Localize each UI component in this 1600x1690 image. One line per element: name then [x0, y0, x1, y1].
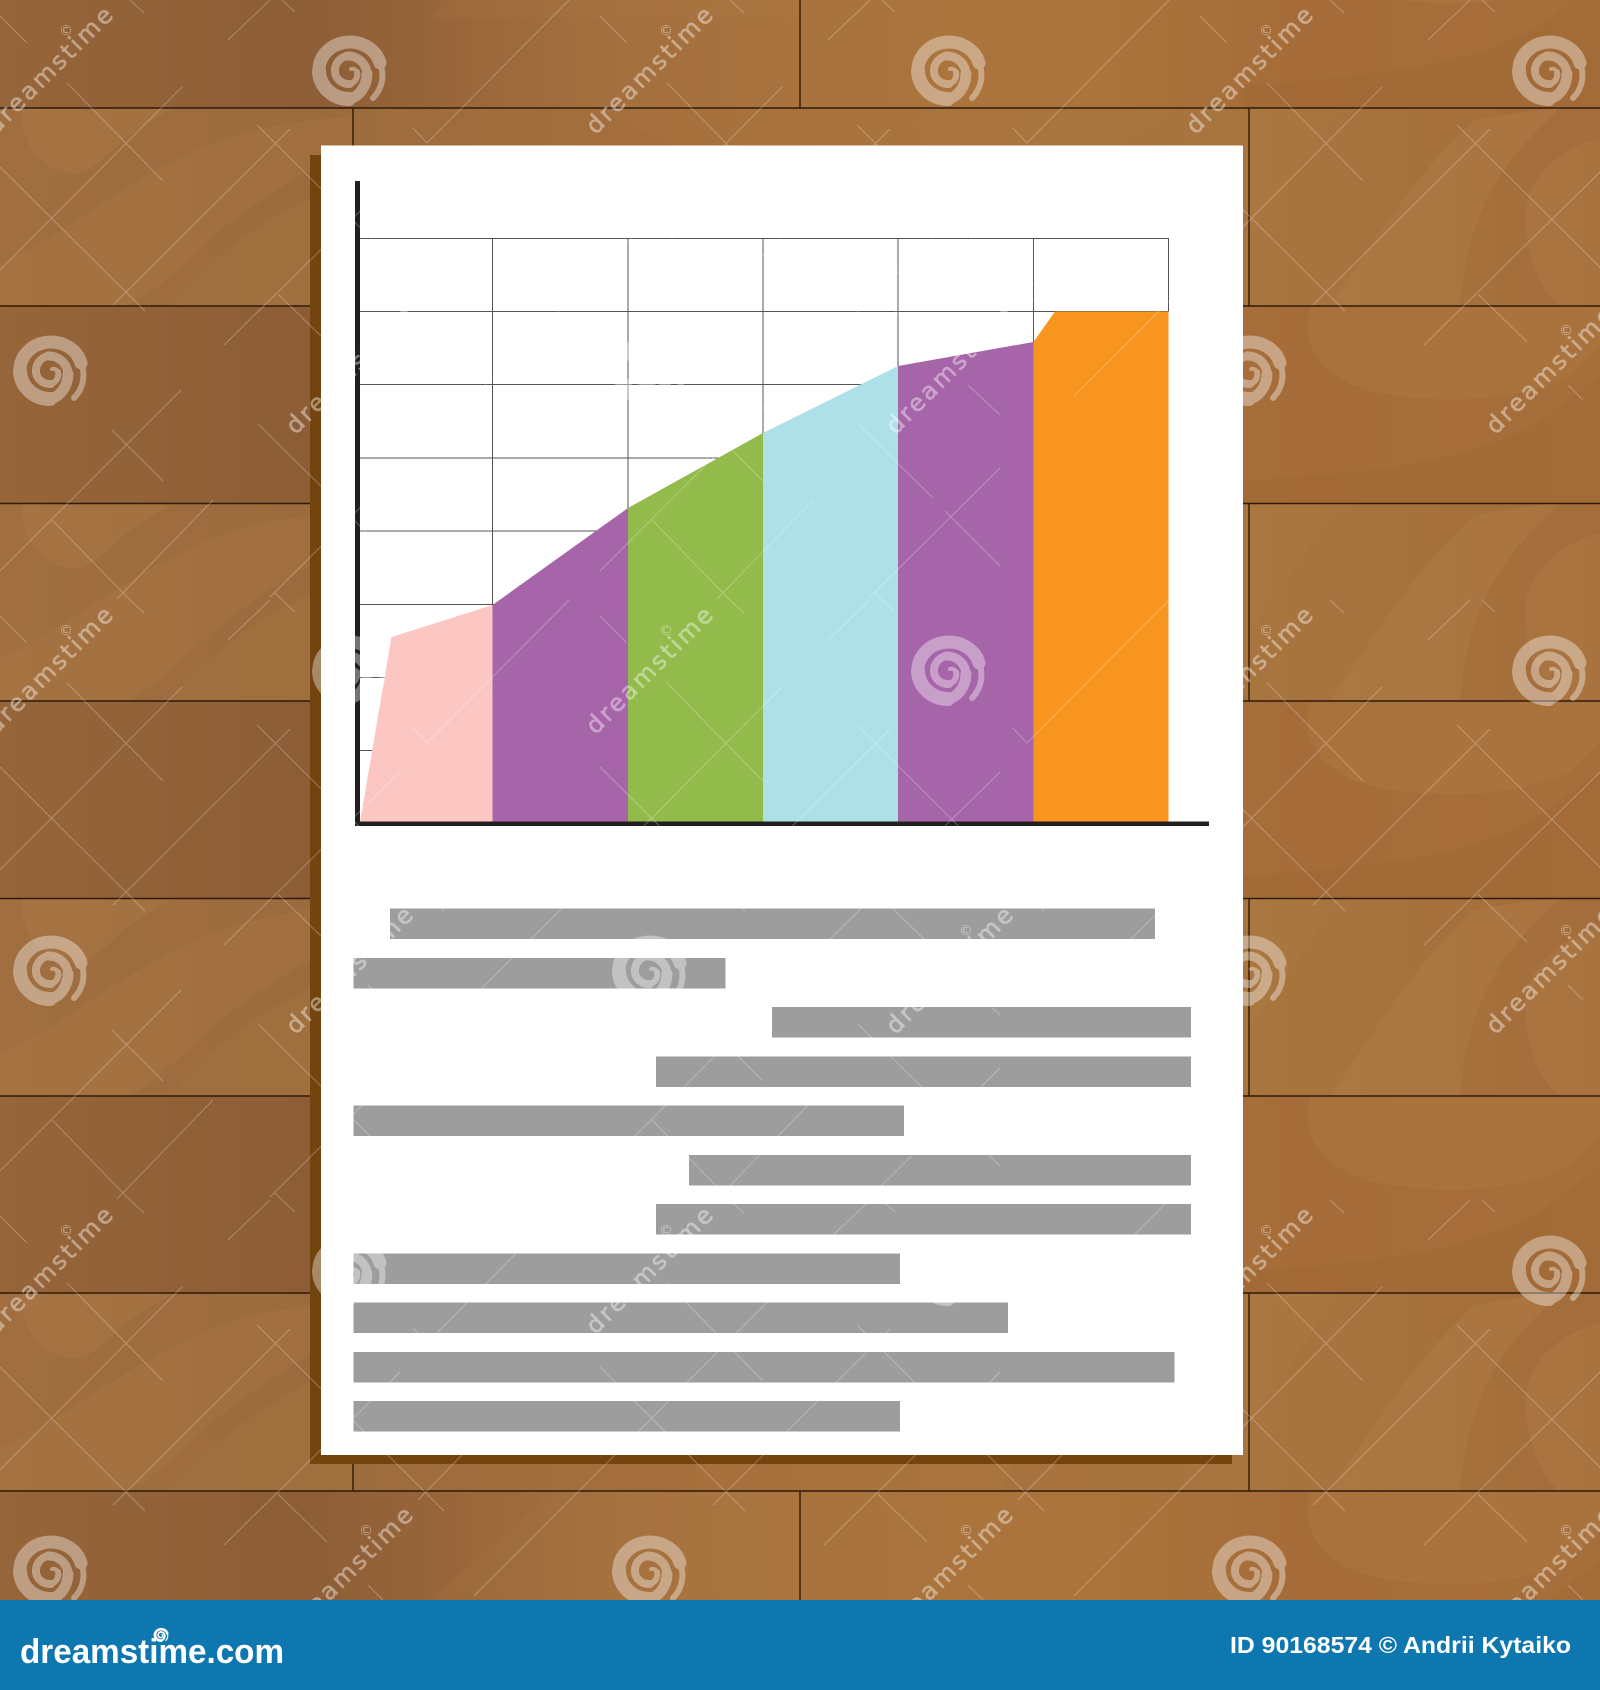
- footer bar: [0, 1600, 1600, 1690]
- area chart: [355, 181, 1209, 826]
- document page: [321, 146, 1243, 1455]
- watermark text: ©: [659, 623, 673, 639]
- document drop shadow: [310, 155, 1232, 1464]
- placeholder text lines: [354, 908, 1191, 1432]
- watermark text: ©: [359, 323, 373, 339]
- watermark text: ©: [659, 23, 673, 39]
- watermark text: dreamstime: [580, 1, 719, 140]
- segment: orange: [1034, 312, 1168, 822]
- watermark text: ©: [1259, 23, 1273, 39]
- watermark text: ©: [1559, 923, 1573, 939]
- watermark text: ©: [959, 1523, 973, 1539]
- image credit: ID 90168574 © Andrii Kytaiko: [1230, 1632, 1571, 1658]
- x axis: [355, 822, 1209, 826]
- watermark text: ©: [959, 923, 973, 939]
- watermark text: dreamstime: [880, 901, 1019, 1040]
- segment: purple: [492, 508, 628, 822]
- watermark text: ©: [959, 323, 973, 339]
- watermark text: dreamstime: [1180, 1201, 1319, 1340]
- watermark text: dreamstime: [1180, 601, 1319, 740]
- watermark text: dreamstime: [1180, 1, 1319, 140]
- watermark text: ©: [1259, 1223, 1273, 1239]
- segment: green: [628, 433, 763, 822]
- watermark text: dreamstime: [280, 1501, 419, 1640]
- watermark text: dreamstime: [580, 601, 719, 740]
- watermark text: ©: [59, 23, 73, 39]
- watermark text: ©: [59, 623, 73, 639]
- segment: light blue: [763, 366, 898, 822]
- chart grid: [360, 238, 1168, 822]
- watermark text: ©: [1559, 1523, 1573, 1539]
- watermark text: ©: [359, 1523, 373, 1539]
- watermark text: ©: [359, 923, 373, 939]
- watermark text: dreamstime: [580, 1201, 719, 1340]
- watermark text: ©: [59, 1223, 73, 1239]
- logo spiral icon: [155, 1629, 168, 1641]
- segment: purple 2: [898, 342, 1034, 822]
- watermark text: dreamstime: [280, 901, 419, 1040]
- watermark text: ©: [1259, 623, 1273, 639]
- watermark text: dreamstime: [280, 301, 419, 440]
- watermark text: ©: [659, 1223, 673, 1239]
- watermark text: ©: [1559, 323, 1573, 339]
- segment: pink: [360, 605, 493, 822]
- watermark text: dreamstime: [880, 1501, 1019, 1640]
- logo text: dreamstime.com: [20, 1633, 284, 1671]
- watermark text: dreamstime: [880, 301, 1019, 440]
- y axis: [355, 181, 360, 826]
